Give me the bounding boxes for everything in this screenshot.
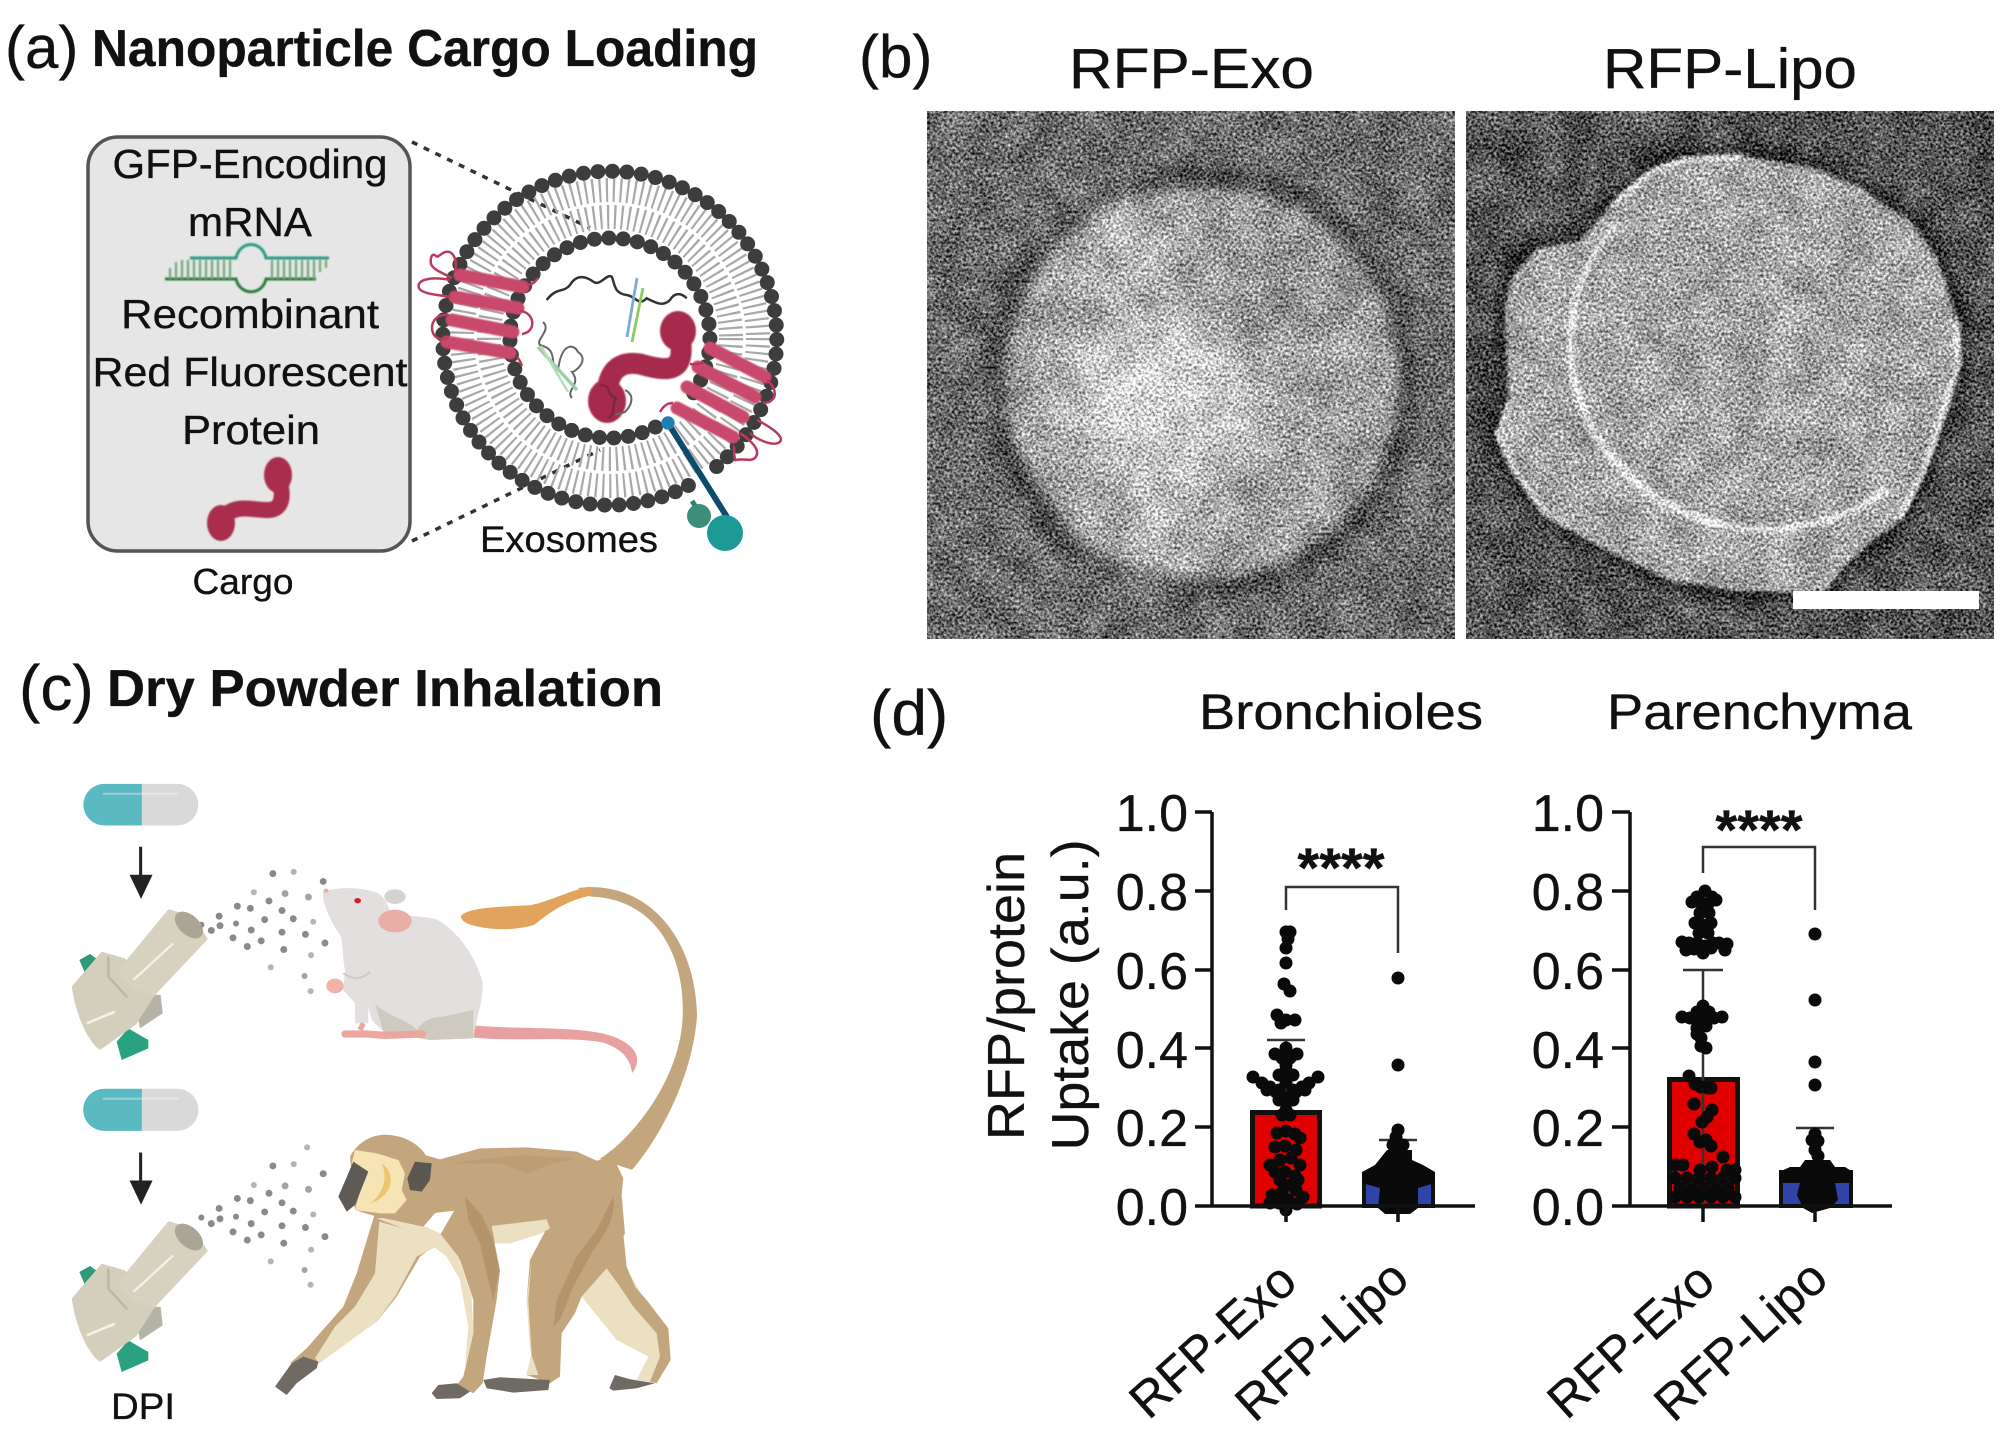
feet — [432, 1383, 470, 1399]
icon: rat — [323, 888, 483, 1040]
y tick labels — [1532, 785, 1604, 1237]
scatter points RFP-Exo — [1246, 926, 1324, 1216]
bar chart: Bronchioles — [1116, 785, 1475, 1432]
label: GFP-Encoding: GFP-Encoding — [112, 141, 388, 187]
scale bar — [1793, 591, 1979, 609]
icon: monkey tail tip — [461, 887, 593, 929]
protein loops — [419, 252, 781, 460]
heading: RFP-Lipo micrograph: RFP-Lipo — [1603, 37, 1857, 101]
significance bracket — [1703, 847, 1815, 910]
heading: Parenchyma: Parenchyma — [1607, 684, 1912, 740]
heading: Nanoparticle Cargo Loading: Nanoparticle Cargo Loading — [92, 20, 758, 78]
ear — [407, 1162, 432, 1192]
back shading — [447, 1155, 577, 1173]
error bars — [1267, 1040, 1417, 1172]
panel label (d): (d) — [870, 677, 948, 749]
y axis title — [978, 840, 1100, 1150]
scatter points RFP-Lipo — [1362, 972, 1435, 1214]
callout: dashed zoom lines — [412, 142, 600, 541]
x label RFP-Exo: RFP-Exo — [1119, 1252, 1307, 1429]
icon: mRNA strand — [165, 244, 329, 292]
panel label (b): (b) — [859, 23, 932, 90]
icon: exosome — [419, 171, 781, 551]
label: Protein: Protein — [182, 407, 320, 453]
y tick labels — [1116, 785, 1188, 1237]
bar: RFP-Lipo — [1781, 1172, 1851, 1206]
near hind leg inner — [527, 1260, 538, 1375]
particles: top spray — [198, 869, 328, 994]
bar chart: Parenchyma — [1532, 785, 1892, 1432]
y axis title: Uptake (a.u.) — [1042, 840, 1100, 1150]
label: Red Fluorescent: Red Fluorescent — [92, 349, 408, 395]
label: Cargo: Cargo — [192, 561, 294, 602]
panel label (a): (a) — [5, 14, 78, 81]
icon: rat tail — [474, 1025, 637, 1073]
significance stars: **** — [1715, 798, 1803, 861]
cargo inside: mRNA strands — [538, 276, 687, 415]
y tick labels: 1.0 — [1116, 785, 1188, 843]
label: DPI: DPI — [111, 1386, 175, 1427]
x label RFP-Lipo: RFP-Lipo — [1224, 1249, 1419, 1432]
icon: monkey tail — [578, 887, 697, 1170]
icon: capsule bottom — [83, 1089, 199, 1131]
y tick labels: 0.0 — [1116, 1179, 1188, 1237]
belly — [492, 1219, 550, 1243]
arrow: capsule to inhaler top — [132, 847, 150, 895]
icon: inhaler bottom — [72, 1218, 208, 1372]
y axis title: RFP/protein — [978, 852, 1036, 1140]
heading: RFP-Exo micrograph: RFP-Exo — [1069, 37, 1314, 101]
axes — [1612, 812, 1892, 1222]
micrograph: RFP-Lipo — [1466, 111, 1994, 639]
label: Exosomes: Exosomes — [480, 519, 658, 560]
leg shading — [553, 1197, 614, 1327]
hand — [275, 1357, 318, 1395]
lipid heads — [443, 171, 777, 505]
scatter points RFP-Lipo — [1779, 928, 1853, 1213]
tetraspanin stalk — [668, 423, 727, 517]
error bars — [1683, 970, 1834, 1206]
face ruff — [352, 1150, 407, 1213]
head — [350, 1135, 447, 1227]
icon: capsule top — [83, 784, 198, 825]
y tick labels: 0.4 — [1532, 1022, 1604, 1080]
micrograph: RFP-Exo — [927, 111, 1455, 639]
near arm — [433, 1195, 500, 1393]
bar: RFP-Exo — [1252, 1112, 1320, 1206]
significance stars: **** — [1297, 836, 1385, 899]
chest — [377, 1217, 473, 1367]
label: Recombinant: Recombinant — [121, 291, 380, 337]
panel label (c): (c) — [19, 652, 94, 724]
x label RFP-Exo: RFP-Exo — [1537, 1252, 1725, 1429]
muzzle — [338, 1162, 368, 1212]
significance bracket — [1286, 887, 1398, 953]
icon: monkey — [275, 1135, 671, 1399]
arrow: capsule to inhaler bottom — [132, 1152, 150, 1201]
scatter points RFP-Exo — [1668, 884, 1742, 1204]
bar: RFP-Lipo — [1364, 1174, 1433, 1206]
y tick labels: 0.0 — [1532, 1179, 1604, 1237]
particles: bottom spray — [198, 1144, 328, 1288]
x label RFP-Lipo: RFP-Lipo — [1643, 1249, 1838, 1432]
cargo inside: protein — [588, 311, 696, 423]
lipid tails — [462, 190, 758, 486]
panel: inhalation illustration — [72, 784, 697, 1399]
y tick labels: 0.8 — [1532, 864, 1604, 922]
heading: Dry Powder Inhalation: Dry Powder Inhalation — [107, 660, 663, 718]
far foot — [609, 1375, 655, 1391]
heading: Bronchioles: Bronchioles — [1199, 684, 1483, 740]
y tick labels: 0.4 — [1116, 1022, 1188, 1080]
capsules, arrows, sprays and tails — [83, 784, 697, 1288]
y tick labels: 0.6 — [1116, 943, 1188, 1001]
icon: inhaler top — [72, 906, 208, 1060]
far arm — [290, 1213, 433, 1363]
bar: RFP-Exo — [1670, 1080, 1738, 1206]
y tick labels: 0.8 — [1116, 864, 1188, 922]
y tick labels: 1.0 — [1532, 785, 1604, 843]
torso and near hind leg — [360, 1147, 625, 1383]
y tick labels: 0.2 — [1532, 1100, 1604, 1158]
icon: red fluorescent protein — [207, 457, 292, 541]
y tick labels: 0.6 — [1532, 943, 1604, 1001]
axes — [1195, 812, 1475, 1222]
y tick labels: 0.2 — [1116, 1100, 1188, 1158]
far hind leg — [582, 1267, 671, 1383]
panel: cargo box — [88, 137, 410, 551]
membrane proteins — [447, 275, 765, 437]
label: mRNA: mRNA — [188, 199, 313, 245]
